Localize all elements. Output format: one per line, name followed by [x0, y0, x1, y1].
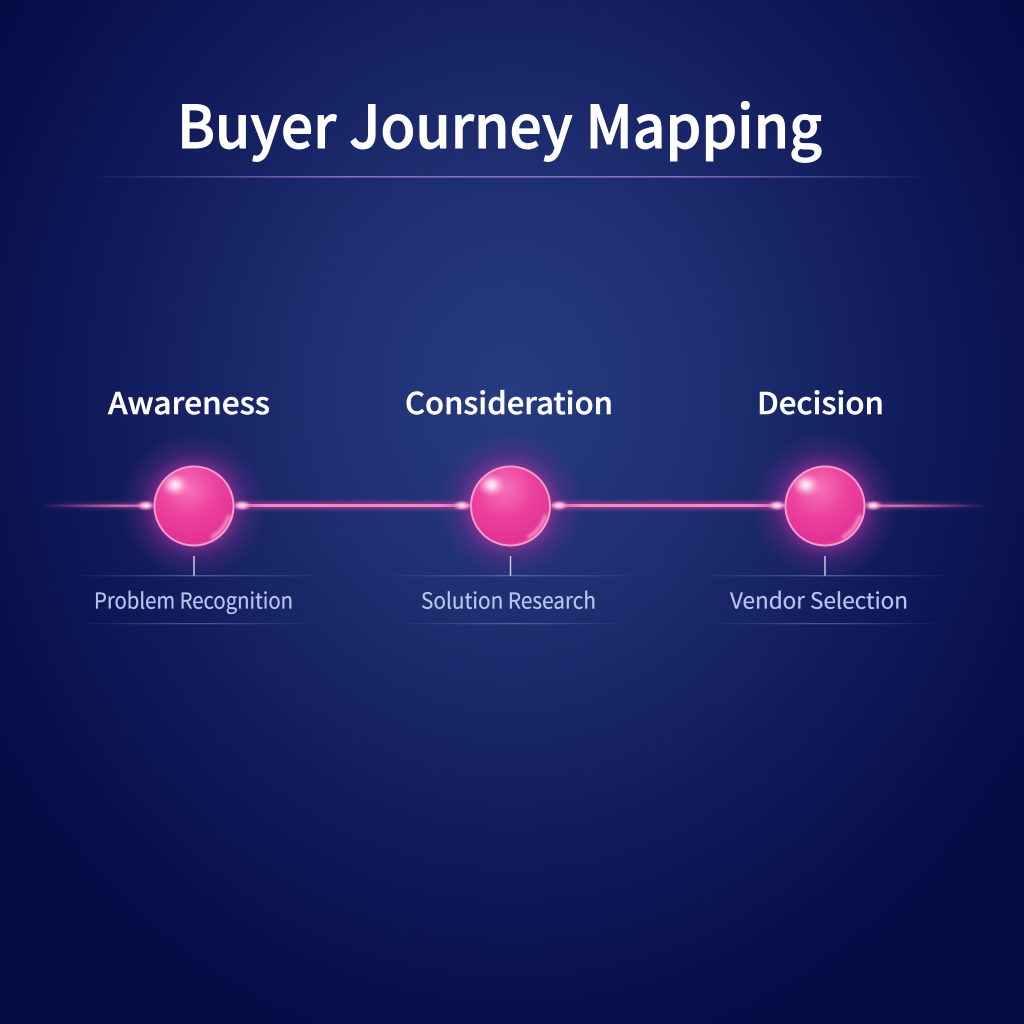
title underline — [90, 176, 930, 178]
connector stem — [824, 556, 826, 576]
timeline connector — [40, 502, 988, 509]
stage heading: Awareness — [108, 379, 270, 423]
label top rule — [698, 575, 953, 576]
connector stem — [193, 556, 195, 576]
stage description: Solution Research — [421, 584, 596, 616]
line flares — [136, 500, 252, 511]
stage description: Problem Recognition — [94, 584, 293, 616]
stage 1: Awareness — [70, 379, 325, 624]
sphere node — [786, 466, 864, 546]
title: Buyer Journey Mapping — [177, 80, 822, 165]
line flares — [452, 500, 569, 511]
line flares — [767, 500, 883, 511]
node glow — [120, 432, 268, 580]
stage heading: Consideration — [405, 379, 613, 423]
sphere node — [471, 466, 550, 546]
stage description: Vendor Selection — [730, 584, 908, 616]
connector stem — [510, 556, 511, 576]
node glow — [436, 432, 584, 580]
node glow — [751, 432, 899, 580]
label bottom rule — [395, 623, 630, 624]
label bottom rule — [80, 623, 315, 624]
stage 2: Consideration — [385, 379, 640, 624]
sphere node — [154, 466, 234, 546]
label bottom rule — [708, 623, 943, 624]
stage heading: Decision — [757, 379, 884, 423]
label top rule — [70, 575, 325, 576]
stage 3: Decision — [698, 379, 953, 624]
label top rule — [385, 575, 640, 576]
